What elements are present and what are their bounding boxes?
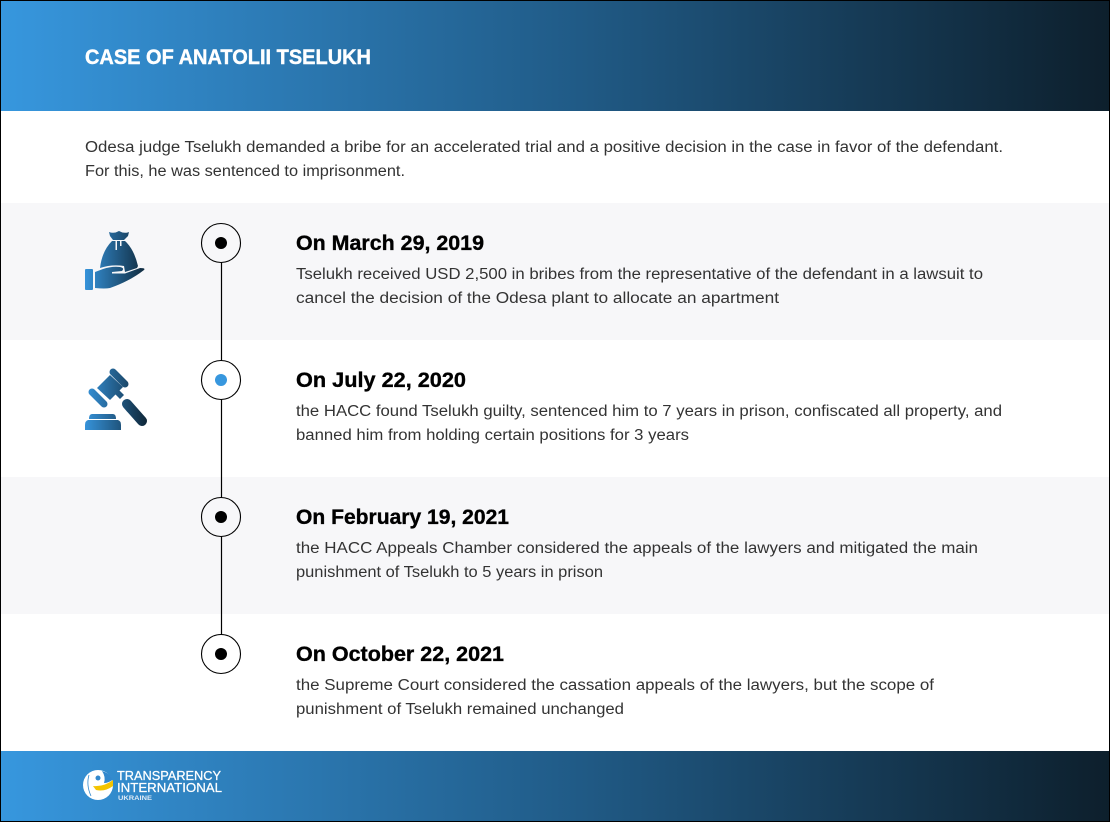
event 3 text [296, 506, 978, 581]
intro text [85, 139, 1003, 180]
logo: Transparency International Ukraine [83, 769, 222, 802]
footer banner [0, 751, 1110, 822]
event 1 marker [202, 224, 240, 262]
intro text: Odesa judge Tselukh demanded a bribe for an accelerated trial and a positive decision in the case in favor of the defendant. [85, 139, 1003, 156]
event 2 text: On July 22, 2020 [296, 369, 466, 392]
intro text: For this, he was sentenced to imprisonment. [85, 163, 405, 180]
event 1 text: Tselukh received USD 2,500 in bribes from the representative of the defendant in a lawsuit to [296, 266, 983, 283]
logo: Transparency International Ukraine: INTERNATIONAL [117, 781, 222, 795]
event 3 text: punishment of Tselukh to 5 years in prison [296, 564, 603, 581]
event 3 marker [202, 498, 240, 536]
event 1 text [296, 232, 983, 307]
event 2 marker [202, 360, 240, 400]
event 3 text: the HACC Appeals Chamber considered the appeals of the lawyers and mitigated the main [296, 540, 978, 557]
event 1 text: cancel the decision of the Odesa plant to allocate an apartment [296, 290, 780, 307]
event 4 text: the Supreme Court considered the cassation appeals of the lawyers, but the scope of [296, 677, 935, 694]
event 4 marker [202, 634, 240, 674]
event 1 text: On March 29, 2019 [296, 232, 484, 255]
timeline line [220, 262, 222, 635]
logo: Transparency International Ukraine: TRANSPARENCY [117, 769, 222, 783]
event 4 text: punishment of Tselukh remained unchanged [296, 701, 624, 718]
header banner [0, 0, 1110, 111]
row background: first event [0, 203, 1110, 340]
event 2 text: the HACC found Tselukh guilty, sentenced him to 7 years in prison, confiscated all property, and [296, 403, 1002, 420]
event 3 text: On February 19, 2021 [296, 506, 509, 529]
event 2 text: banned him from holding certain positions for 3 years [296, 427, 689, 444]
icon: judge gavel [85, 372, 142, 430]
event 4 text [296, 643, 935, 718]
event 4 text: On October 22, 2021 [296, 643, 504, 666]
title: CASE OF ANATOLII TSELUKH [85, 46, 371, 69]
event 2 text [296, 369, 1002, 444]
logo: Transparency International Ukraine: UKRAINE [118, 795, 153, 802]
row background: third event [0, 477, 1110, 614]
icon: hand holding money bag [85, 231, 144, 290]
